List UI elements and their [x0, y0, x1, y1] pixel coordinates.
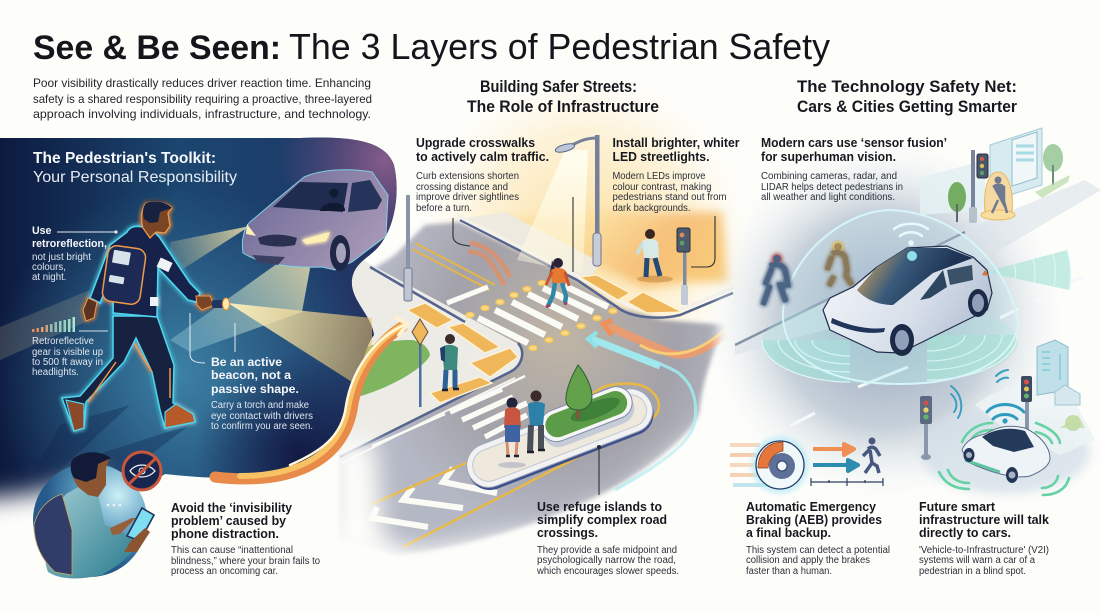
- arrow: cyan traffic flow: [588, 332, 696, 490]
- heading: technology: [797, 78, 1018, 116]
- text: invisibility problem: blindness,” where your brain fails to: [171, 556, 320, 567]
- intro text: [33, 76, 372, 121]
- road studs: [466, 281, 617, 350]
- text: refuge islands: [536, 500, 679, 577]
- light cone: [517, 150, 588, 273]
- text: AEB: Automatic Emergency: [746, 500, 876, 514]
- title: See & Be Seen:: [33, 29, 281, 67]
- text: sensor fusion: Modern cars use ‘sensor fusion’: [761, 136, 947, 150]
- text: AEB: a final backup.: [746, 526, 831, 540]
- text: AEB: faster than a human.: [746, 566, 832, 577]
- head: [142, 202, 172, 238]
- text: active beacon: beacon, not a: [211, 368, 291, 382]
- warm glow: [395, 60, 760, 420]
- text: refuge islands: They provide a safe midpoint and: [537, 545, 677, 556]
- pavement band: [735, 180, 1101, 355]
- text: retroreflection: at night.: [32, 272, 66, 283]
- distance ruler: [811, 478, 883, 486]
- text: refuge islands: which encourages slower speeds.: [536, 566, 679, 577]
- car headlight beam right: [170, 236, 316, 352]
- text: smart infrastructure: Future smart: [919, 500, 996, 514]
- road dashes: [790, 277, 1083, 426]
- text: crosswalks: Upgrade crosswalks: [416, 136, 535, 150]
- text: invisibility problem: Avoid the ‘invisibility: [171, 501, 292, 515]
- walking pedestrian with reflective glow: [62, 201, 214, 431]
- traffic light left: [920, 396, 932, 460]
- text: 500 ft visibility: headlights.: [32, 367, 79, 378]
- text: sensor fusion: Combining cameras, radar, and: [761, 171, 897, 182]
- leader: torch: [190, 313, 235, 363]
- text: retroreflection: retroreflection,: [32, 238, 107, 250]
- curb upper: [460, 220, 733, 318]
- text: crosswalks: to actively calm traffic.: [416, 150, 549, 164]
- left hand: [83, 298, 97, 321]
- heading: infrastructure: Building Safer Streets:: [480, 78, 637, 96]
- upper crosswalk: [478, 286, 608, 343]
- text: invisibility problem: [171, 501, 320, 577]
- arrow: orange traffic flow: [603, 320, 734, 355]
- tactile pads: [407, 275, 682, 403]
- smart road corner pavement: [975, 372, 1095, 455]
- text: active beacon: passive shape.: [211, 382, 299, 396]
- text: 500 ft visibility: [32, 336, 103, 378]
- text: 500 ft visibility: Retroreflective: [32, 336, 94, 347]
- panel: technology safety scene: [690, 125, 1101, 515]
- backpack: [34, 494, 72, 575]
- text: LED streetlights: colour contrast, making: [612, 182, 712, 193]
- rain pedestrians: [763, 242, 852, 305]
- legs: [62, 316, 195, 431]
- caliper: [758, 442, 783, 468]
- street lamp: [554, 135, 601, 266]
- text: AEB: collision and apply the brakes: [746, 555, 870, 566]
- white fade left: [330, 440, 385, 560]
- text: active beacon: Carry a torch and make: [211, 400, 309, 411]
- people on island: [498, 390, 545, 468]
- arrow: flow ribbon from panel into street: [215, 318, 408, 479]
- text: smart infrastructure: pedestrian in a blind spot.: [919, 566, 1026, 577]
- pedestrian on crosswalk: [546, 258, 569, 307]
- heading: toolkit: The Pedestrian's Toolkit:: [33, 150, 216, 167]
- detected pedestrian halo: [981, 172, 1015, 220]
- disc: [756, 441, 804, 489]
- smart road surface: [920, 410, 1090, 494]
- intro text: approach involving individuals, infrastructure, and technology.: [33, 107, 371, 121]
- text: retroreflection: Use: [32, 225, 52, 237]
- blue arrow: [813, 460, 858, 471]
- orange arrow: [813, 444, 854, 455]
- hands and phone: [110, 518, 136, 535]
- text: smart infrastructure: systems will warn a car of a: [919, 555, 1036, 566]
- text: LED streetlights: pedestrians stand out from: [612, 192, 726, 203]
- left lamp pole: [404, 195, 412, 301]
- text: LED streetlights: Modern LEDs improve: [612, 171, 706, 182]
- curb left: [340, 267, 522, 457]
- road surface: [340, 222, 728, 555]
- text: smart infrastructure: [919, 500, 1050, 577]
- car: [242, 170, 388, 271]
- lane markings upper: [412, 243, 495, 290]
- road shadow bands: [50, 405, 189, 472]
- text: invisibility problem: This can cause “inattentional: [171, 545, 293, 556]
- text: crosswalks: [416, 136, 549, 214]
- text: LED streetlights: [612, 136, 740, 214]
- white fade lower left: [0, 470, 125, 560]
- panel: infrastructure street scene: [330, 60, 770, 614]
- heading: toolkit: Your Personal Responsibility: [33, 169, 237, 186]
- text: sensor fusion: all weather and light conditions.: [761, 192, 895, 203]
- text: active beacon: to confirm you are seen.: [211, 421, 313, 432]
- text: refuge islands: Use refuge islands to: [537, 500, 662, 514]
- text: refuge islands: simplify complex road: [537, 513, 667, 527]
- text: LED streetlights: dark backgrounds.: [612, 203, 690, 214]
- text: crosswalks: Curb extensions shorten: [416, 171, 519, 182]
- text: sensor fusion: [761, 136, 947, 203]
- icons: v2i wifi arcs: [939, 370, 1069, 495]
- torso and hood: [90, 226, 200, 317]
- title: [33, 26, 830, 67]
- lower crosswalk: [450, 389, 527, 437]
- intro text: safety is a shared responsibility requiring a proactive, three-layered: [33, 92, 372, 106]
- main autonomous car: [823, 246, 992, 356]
- dark backdrop: [0, 138, 397, 525]
- text: LED streetlights: LED streetlights.: [612, 150, 710, 164]
- pale pavement: [455, 212, 600, 280]
- text: retroreflection: not just bright: [32, 252, 91, 263]
- text: sensor fusion: LIDAR helps detect pedestrians in: [761, 182, 903, 193]
- building cluster: [1037, 340, 1085, 431]
- reflectivity bar meter: [32, 317, 108, 332]
- heading: toolkit: [33, 150, 237, 186]
- traffic light right: [1021, 376, 1032, 430]
- heading: infrastructure: [467, 78, 659, 116]
- icon: dome wifi: [894, 224, 928, 244]
- man waiting at corner: [440, 334, 459, 390]
- text: retroreflection: [32, 225, 107, 283]
- text: retroreflection: colours,: [32, 262, 66, 273]
- text: 500 ft visibility: to 500 ft away in: [32, 357, 103, 368]
- ground sensor fans: [762, 250, 1070, 385]
- warm sidewalk upper right: [500, 212, 728, 288]
- building: [920, 128, 1042, 215]
- leaders: street callouts: [453, 197, 715, 495]
- tree: [566, 365, 592, 419]
- left pavement: [340, 248, 523, 458]
- heading: infrastructure: The Role of Infrastructure: [467, 98, 659, 116]
- disc glow: [751, 436, 809, 494]
- text: smart infrastructure: infrastructure will talk: [919, 513, 1050, 527]
- speed streaks: [730, 445, 770, 485]
- text: invisibility problem: phone distraction.: [171, 527, 279, 541]
- text: invisibility problem: process an oncoming car.: [171, 566, 278, 577]
- torso: [45, 486, 140, 578]
- text: LED streetlights: Install brighter, whiter: [612, 136, 740, 150]
- text: 500 ft visibility: gear is visible up: [32, 347, 103, 358]
- text: crosswalks: crossing distance and: [416, 182, 508, 193]
- heading: technology: Cars & Cities Getting Smarter: [797, 98, 1018, 116]
- white fade bottom: [330, 420, 770, 614]
- refuge island: [460, 382, 660, 497]
- text: active beacon: Be an active: [211, 355, 282, 369]
- head: [71, 452, 109, 497]
- text: active beacon: eye contact with drivers: [211, 411, 313, 422]
- grass: [345, 340, 430, 400]
- text: crosswalks: improve driver sightlines: [416, 192, 519, 203]
- chevrons: [372, 468, 497, 527]
- center road line: [372, 376, 525, 446]
- yellow island line: [370, 384, 659, 547]
- intro text: Poor visibility drastically reduces driver reaction time. Enhancing: [33, 76, 371, 90]
- panel: personal responsibility dark scene: [0, 138, 397, 518]
- text: smart infrastructure: 'Vehicle-to-Infrastructure' (V2I): [919, 545, 1049, 556]
- icon: no eye sign: [123, 452, 161, 490]
- text: refuge islands: psychologically narrow the road,: [537, 555, 676, 566]
- trees: [948, 144, 1070, 222]
- smart connected car: [962, 426, 1050, 483]
- text: active beacon: [211, 355, 313, 432]
- text: refuge islands: crossings.: [537, 526, 598, 540]
- text: AEB: [746, 500, 890, 577]
- car headlight beam left: [170, 226, 250, 276]
- haze backdrop: [690, 125, 1101, 515]
- text: sensor fusion: for superhuman vision.: [761, 150, 896, 164]
- text: crosswalks: before a turn.: [416, 203, 472, 214]
- title: The 3 Layers of Pedestrian Safety: [289, 26, 830, 67]
- leader: retroreflection: [57, 230, 118, 234]
- text: AEB: This system can detect a potential: [746, 545, 890, 556]
- thinking dots: [107, 504, 121, 506]
- road wave overlay: [468, 243, 510, 285]
- text: AEB: Braking (AEB) provides: [746, 513, 882, 527]
- torch hand: [196, 296, 214, 310]
- circular backdrop: [33, 463, 147, 577]
- torch beam: [228, 303, 372, 382]
- torch: [212, 298, 230, 310]
- heading: technology: The Technology Safety Net:: [797, 78, 1017, 96]
- icon: brake disc and stopping distance: [730, 436, 883, 494]
- walking figure: [868, 438, 876, 444]
- traffic light: [677, 228, 690, 305]
- warning sign: [412, 319, 428, 407]
- text: smart infrastructure: directly to cars.: [919, 526, 1011, 540]
- illustration: phone distracted man: [33, 452, 154, 578]
- sensor dome: [783, 210, 1018, 384]
- backpack: [101, 245, 147, 305]
- pedestrian under LED light: [637, 229, 673, 282]
- traffic light upper: [969, 150, 988, 223]
- text: invisibility problem: problem’ caused by: [171, 514, 286, 528]
